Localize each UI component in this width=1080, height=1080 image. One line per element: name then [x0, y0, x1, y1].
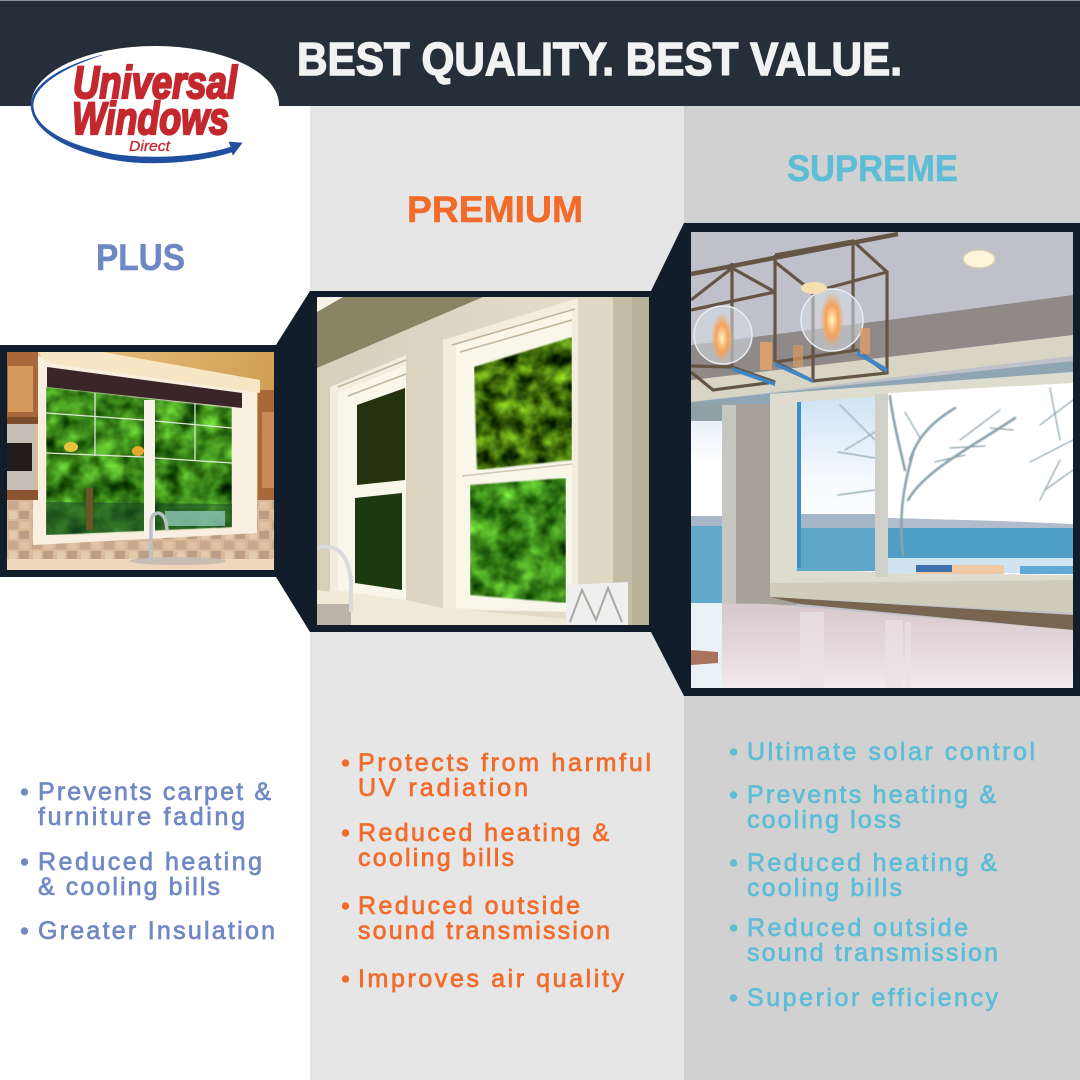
right window — [443, 298, 578, 612]
faucet — [317, 547, 351, 612]
photo: plus kitchen window — [7, 352, 274, 570]
top trim — [38, 352, 260, 393]
roller blind — [47, 367, 242, 408]
bullet: UV radiation — [342, 749, 651, 802]
bullet: sound transmission: Reduced outside — [358, 892, 580, 920]
bullet: reduced bills: Reduced heating — [38, 848, 262, 876]
backsplash — [7, 500, 274, 559]
mullion — [875, 394, 888, 577]
microwave — [7, 424, 36, 490]
bullet: sound transmission: Reduced outside — [747, 914, 968, 942]
header band — [0, 0, 1080, 106]
bullet: UV radiation: UV radiation — [358, 774, 528, 802]
decorative vase — [566, 582, 628, 625]
bullet: carpet fading — [21, 778, 271, 831]
bullet: insulation: Greater Insulation — [38, 917, 275, 945]
right pane — [888, 383, 1073, 575]
wall band — [691, 295, 1073, 385]
left window — [330, 355, 406, 602]
recessed light — [963, 250, 995, 268]
logo swoosh arrow — [31, 55, 242, 163]
counter reflections — [800, 612, 911, 646]
faucet and sink — [130, 557, 226, 565]
list: premium features — [342, 749, 651, 993]
countertop — [691, 603, 1073, 688]
logo: Universal Windows Direct — [31, 46, 279, 164]
photo: supreme waterfront windows — [691, 232, 1073, 688]
right cabinet — [258, 390, 274, 502]
bullet: reduced bills: Reduced heating & — [358, 819, 609, 847]
bullet: reduced bills: cooling bills — [747, 874, 902, 902]
window casing — [33, 356, 257, 545]
bullet: reduced bills: Reduced heating & — [747, 849, 997, 877]
bullet: UV radiation: Protects from harmful — [358, 749, 651, 777]
bullet: reduced bills: cooling bills — [358, 844, 514, 872]
bullet: carpet fading: furniture fading — [38, 803, 245, 831]
logo wordmark: Direct: Direct — [129, 138, 171, 155]
list: supreme features — [730, 738, 1035, 1012]
upper cabinets — [7, 352, 38, 420]
globe bulbs — [694, 306, 752, 364]
bullet: reduced bills — [21, 848, 262, 901]
foliage glass — [46, 387, 232, 535]
bullet: sound transmission — [730, 914, 998, 967]
heading: PLUS: PLUS — [96, 237, 185, 278]
bullet: cooling loss — [730, 781, 996, 834]
logo wordmark: Universal: Universal — [73, 57, 238, 108]
bullet: carpet fading: Prevents carpet & — [38, 778, 271, 806]
ceiling — [317, 297, 483, 368]
stepped dark frame — [0, 223, 1080, 696]
logo wordmark: Windows: Windows — [72, 93, 229, 144]
bullet: cooling loss: Prevents heating & — [747, 781, 996, 809]
sill — [770, 580, 1073, 613]
right wall — [613, 297, 632, 625]
bullet: solar control: Ultimate solar control — [747, 738, 1035, 766]
title: BEST QUALITY. BEST VALUE. — [297, 33, 902, 85]
bullet: efficiency: Superior efficiency — [747, 984, 998, 1012]
heading: SUPREME: SUPREME — [787, 148, 958, 189]
bullet: air quality: Improves air quality — [358, 965, 624, 993]
bullet: cooling loss: cooling loss — [747, 806, 901, 834]
pendant lights — [691, 234, 898, 390]
left pane — [797, 397, 875, 572]
bullet: reduced bills — [730, 849, 997, 902]
heading: PREMIUM: PREMIUM — [407, 189, 583, 230]
window frame — [770, 372, 1073, 584]
bullet: reduced bills: & cooling bills — [38, 873, 220, 901]
left door pane — [691, 403, 736, 605]
list: plus features — [21, 778, 275, 945]
photo: premium double-hung windows — [317, 297, 649, 625]
bullet: sound transmission: sound transmission — [358, 917, 610, 945]
bullet: reduced bills — [342, 819, 609, 872]
sill — [317, 590, 578, 625]
bare trees — [838, 388, 1073, 555]
mullion and muntins — [144, 400, 155, 535]
bullet: sound transmission: sound transmission — [747, 939, 998, 967]
bullet: sound transmission — [342, 892, 610, 945]
